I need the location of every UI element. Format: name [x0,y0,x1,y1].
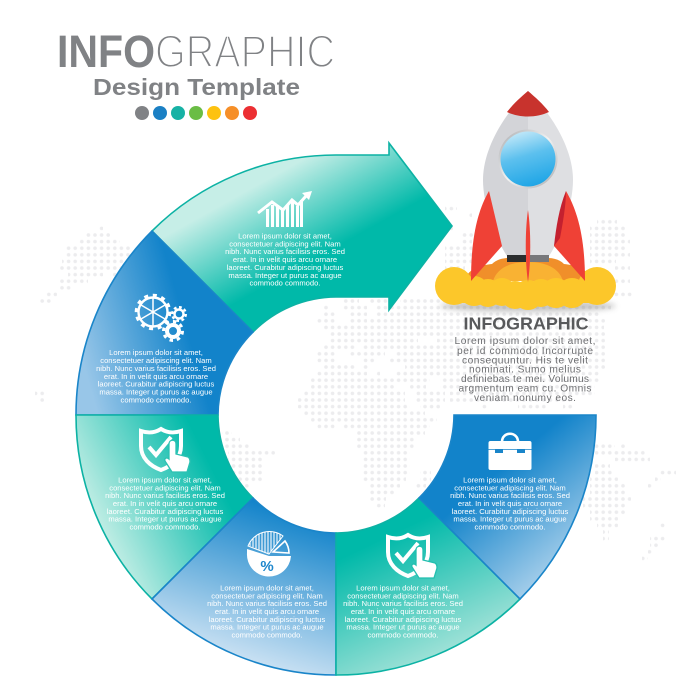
text block: nibh. Nunc varius facilisis eros. Sed [450,491,570,500]
text block: massa. Integer ut purus ac augue [228,271,342,280]
text block: massa. Integer ut purus ac augue [453,515,567,524]
porthole [498,130,558,188]
text block: massa. Integer ut purus ac augue [99,388,213,396]
nozzle [507,255,549,262]
icon: pie chart [247,530,291,577]
text block: commodo commodo. [250,279,320,288]
text block: commodo commodo. [121,395,191,404]
icon text: percent: % [260,558,274,575]
flames [465,258,591,281]
subtitle: Design Template [93,74,300,100]
text block: commodo commodo. [368,630,438,640]
text block: erat. In in velit quis arcu ornare [215,607,319,616]
text block: nibh. Nunc varius facilisis eros. Sed [343,599,463,608]
text block: Lorem ipsum dolor sit amet, [463,476,557,484]
panel: gears segment [76,231,253,415]
rocket body [483,91,573,256]
rocket text block [454,336,596,404]
smoke shadow [440,300,616,312]
text block: massa. Integer ut purus ac augue [210,623,324,632]
text block: commodo commodo. [232,630,302,640]
rocket text block: nominati. Sumo melius [469,364,581,376]
panel: arrow segment [152,143,452,332]
panel: bottom-right shield segment [336,498,520,675]
text block: Lorem ipsum dolor sit amet, [109,348,203,357]
panel: bottom pie segment [152,498,336,675]
text block: consectetuer adipiscing elit. Nam [211,591,323,600]
text block: commodo commodo. [475,522,545,532]
title: INFO: INFO [57,26,155,77]
text block: nibh. Nunc varius facilisis eros. Sed [96,364,216,373]
text block: laoreet. Curabitur adipiscing luctus [345,615,461,624]
text block: erat. In in velit quis arcu ornare [113,499,217,508]
rocket heading: INFOGRAPHIC [464,314,589,334]
text block: consectetuer adipiscing elit. Nam [100,356,212,365]
text block: consectetuer adipiscing elit. Nam [229,239,341,248]
text block: erat. In in velit quis arcu ornare [233,255,337,264]
text block: massa. Integer ut purus ac augue [346,623,460,632]
text block: Lorem ipsum dolor sit amet, [238,232,332,240]
fins [471,191,585,282]
text block: Lorem ipsum dolor sit amet, [118,476,212,484]
text block: erat. In in velit quis arcu ornare [458,499,562,508]
rocket text block: per id commodo Incorrupte [457,346,593,357]
text block: Lorem ipsum dolor sit amet, [220,584,314,592]
rocket text block: argmentum eam cu. Omnis [458,383,592,394]
text block: consectetuer adipiscing elit. Nam [347,591,459,600]
icon: shield with hand [141,429,190,472]
cloud [435,267,616,310]
colour dots [135,106,257,120]
icon: briefcase [488,434,532,470]
panel: right briefcase segment [419,415,596,599]
rocket text block: Lorem ipsum dolor sit amet, [454,336,596,347]
text block: erat. In in velit quis arcu ornare [104,372,208,381]
icon: shield with hand [388,535,437,578]
nose cone [507,91,549,116]
icon: gears [136,296,186,340]
text block: laoreet. Curabitur adipiscing luctus [227,263,343,272]
text block: nibh. Nunc varius facilisis eros. Sed [105,491,225,500]
icon: growth chart [258,191,312,227]
text block: laoreet. Curabitur adipiscing luctus [107,507,223,516]
title: GRAPHIC: GRAPHIC [155,26,335,77]
text block: consectetuer adipiscing elit. Nam [454,483,566,492]
panel: lower-left shield segment [76,415,253,599]
rocket illustration [435,91,616,312]
text block: commodo commodo. [130,522,200,532]
text block: erat. In in velit quis arcu ornare [351,607,455,616]
text block: laoreet. Curabitur adipiscing luctus [452,507,568,516]
text block: nibh. Nunc varius facilisis eros. Sed [225,247,345,256]
text block: laoreet. Curabitur adipiscing luctus [98,380,214,389]
rocket text block: consequuntur. His te velit [462,355,588,366]
text block: nibh. Nunc varius facilisis eros. Sed [207,599,327,608]
rocket text block: definiebas te mei. Volumus [461,374,589,385]
title [57,26,335,77]
rocket text block: veniam nonumy eos. [474,393,576,404]
dotted world map background [35,208,676,558]
text block: Lorem ipsum dolor sit amet, [356,584,450,592]
text block: laoreet. Curabitur adipiscing luctus [209,615,325,624]
text block: consectetuer adipiscing elit. Nam [109,483,221,492]
text block: massa. Integer ut purus ac augue [108,515,222,524]
